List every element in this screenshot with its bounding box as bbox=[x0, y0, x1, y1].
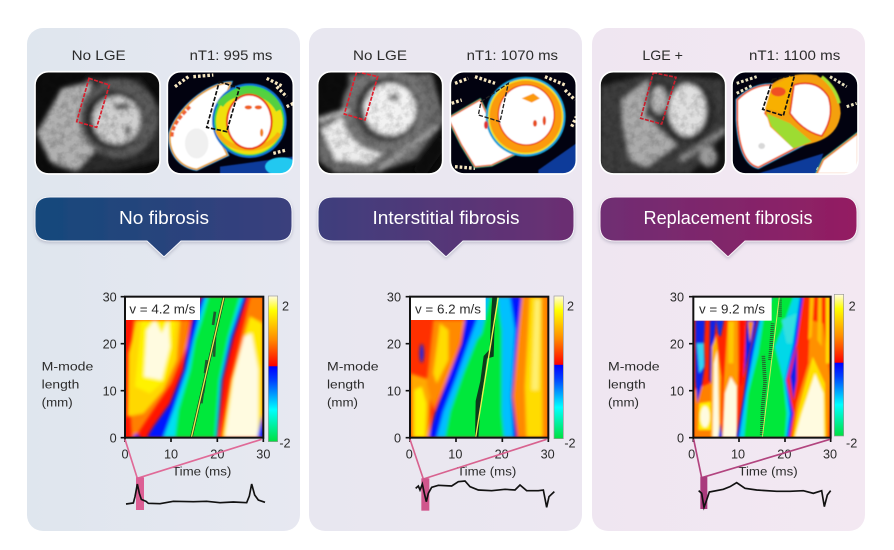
colour bar: 2 bbox=[282, 300, 289, 314]
label: velocity 6.2 m/s bbox=[410, 297, 486, 320]
y axis title: M-mode bbox=[327, 360, 379, 374]
colour bar: -2 bbox=[846, 436, 857, 450]
ECG selected window bbox=[136, 477, 144, 510]
axes bbox=[406, 297, 548, 442]
axis labels bbox=[387, 290, 555, 478]
chart: M-mode heatmap 6.2 m/s bbox=[327, 290, 576, 511]
y axis title: length bbox=[327, 378, 365, 392]
image: LGE MRI, no fibrosis bbox=[35, 72, 162, 174]
ECG selected window bbox=[421, 478, 429, 511]
colour bar: 2 bbox=[567, 300, 574, 314]
chart: M-mode heatmap 9.2 m/s bbox=[608, 290, 857, 509]
axis labels: 20 bbox=[777, 448, 791, 462]
y axis title: (mm) bbox=[42, 396, 73, 410]
zoom connector bbox=[694, 439, 830, 478]
ECG selected window bbox=[700, 477, 707, 509]
axis labels: 30 bbox=[823, 448, 837, 462]
velocity line bbox=[191, 297, 224, 438]
axes bbox=[121, 297, 263, 442]
label: No LGE: No LGE bbox=[353, 48, 407, 63]
banner: Interstitial fibrosis: Interstitial fibrosis bbox=[372, 208, 520, 228]
image: LGE MRI, interstitial fibrosis bbox=[318, 67, 445, 174]
axis labels: 30 bbox=[670, 290, 684, 304]
axis labels: Time (ms) bbox=[738, 464, 798, 478]
label: velocity 9.2 m/s: v = 9.2 m/s bbox=[699, 302, 765, 316]
banner: Replacement fibrosis: Replacement fibrosis bbox=[644, 208, 812, 228]
axis labels: 0 bbox=[121, 448, 129, 462]
ECG trace bbox=[699, 483, 831, 507]
velocity line bbox=[762, 297, 780, 438]
axis labels bbox=[670, 290, 837, 478]
axis labels: 20 bbox=[495, 448, 509, 462]
axis labels: 10 bbox=[670, 384, 684, 398]
panel: replacement fibrosis bbox=[592, 28, 865, 531]
label: velocity 6.2 m/s: v = 6.2 m/s bbox=[415, 302, 481, 316]
axis labels: 20 bbox=[103, 337, 117, 351]
y axis title: M-mode bbox=[42, 360, 93, 374]
zoom connector bbox=[410, 439, 547, 479]
panel: no fibrosis bbox=[27, 28, 300, 531]
label: nT1 1070 ms: nT1: 1070 ms bbox=[467, 48, 558, 63]
axis labels: 0 bbox=[110, 432, 117, 446]
label: velocity 4.2 m/s bbox=[125, 297, 200, 320]
ECG trace bbox=[416, 481, 554, 507]
axis labels: 10 bbox=[448, 448, 462, 462]
y axis title: M-mode bbox=[608, 360, 660, 374]
axis labels: 10 bbox=[103, 384, 117, 398]
label: nT1 1100 ms: nT1: 1100 ms bbox=[749, 48, 841, 63]
colour bar: -2 bbox=[564, 436, 576, 450]
axis labels: 10 bbox=[387, 384, 401, 398]
label: nT1 995 ms: nT1: 995 ms bbox=[190, 48, 273, 63]
banner: No fibrosis bbox=[35, 197, 292, 256]
panel: interstitial fibrosis bbox=[309, 28, 582, 531]
label: LGE +: LGE + bbox=[642, 48, 683, 63]
axis labels: 20 bbox=[210, 448, 224, 462]
zoom connector bbox=[125, 439, 262, 478]
axis labels: 10 bbox=[164, 448, 178, 462]
axis labels: 20 bbox=[387, 337, 401, 351]
axis labels: 0 bbox=[688, 448, 695, 462]
image: LGE MRI, replacement fibrosis bbox=[600, 72, 726, 174]
y axis title: (mm) bbox=[608, 396, 639, 410]
axis labels: 30 bbox=[387, 290, 401, 304]
chart: M-mode heatmap 4.2 m/s bbox=[42, 290, 291, 510]
velocity line bbox=[475, 297, 498, 438]
colour bar bbox=[268, 296, 291, 450]
axis labels: 20 bbox=[670, 337, 684, 351]
banner: No fibrosis: No fibrosis bbox=[119, 208, 209, 228]
colour bar: -2 bbox=[279, 436, 291, 450]
axis labels: 0 bbox=[406, 448, 413, 462]
banner: Replacement fibrosis bbox=[600, 197, 857, 256]
label: No LGE: No LGE bbox=[72, 48, 126, 63]
image: T1 map, no fibrosis bbox=[167, 72, 298, 177]
axis labels: 30 bbox=[541, 448, 555, 462]
axis labels bbox=[103, 290, 270, 478]
colour bar bbox=[834, 294, 857, 450]
label: velocity 9.2 m/s bbox=[693, 297, 772, 321]
ECG trace bbox=[126, 484, 265, 504]
y axis title: length bbox=[608, 378, 646, 392]
image: T1 map, interstitial fibrosis bbox=[448, 72, 576, 174]
axis labels: 0 bbox=[394, 432, 401, 446]
y axis title: length bbox=[42, 378, 79, 392]
colour bar: 2 bbox=[849, 300, 856, 314]
axis labels: 30 bbox=[103, 290, 117, 304]
label: velocity 4.2 m/s: v = 4.2 m/s bbox=[129, 302, 195, 316]
banner: Interstitial fibrosis bbox=[318, 197, 574, 256]
axis labels: 10 bbox=[731, 448, 745, 462]
axis labels: Time (ms) bbox=[172, 464, 231, 478]
axes bbox=[689, 297, 831, 442]
axis labels: Time (ms) bbox=[457, 464, 516, 478]
y axis title: (mm) bbox=[327, 396, 358, 410]
axis labels: 30 bbox=[256, 448, 270, 462]
image: T1 map, replacement fibrosis bbox=[732, 72, 858, 174]
colour bar bbox=[554, 296, 576, 450]
axis labels: 0 bbox=[677, 432, 684, 446]
